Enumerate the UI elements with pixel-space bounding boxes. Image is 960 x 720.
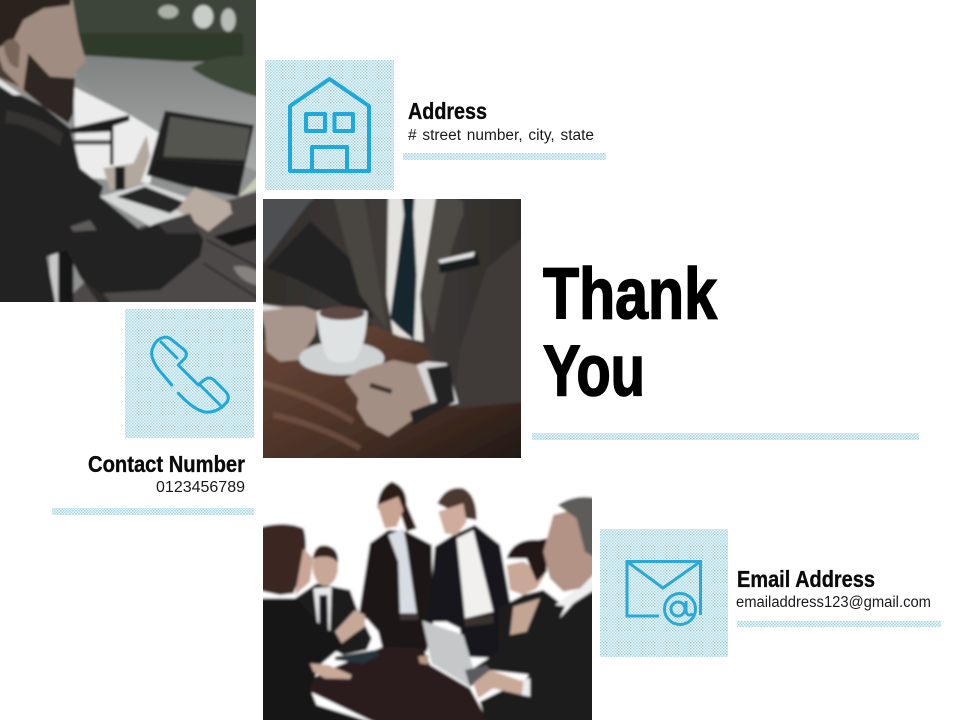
text block: address: # street number, city, state <box>408 127 594 144</box>
jacket <box>263 199 447 360</box>
table <box>71 191 256 302</box>
saucer and cup <box>299 342 384 375</box>
left hand <box>257 303 318 362</box>
text block: contact number: Contact Number <box>88 451 245 477</box>
seated man <box>295 583 372 655</box>
text block: email address <box>736 566 941 627</box>
head <box>0 0 86 96</box>
laptop <box>422 621 473 687</box>
title: Thank You: You <box>543 332 645 412</box>
text block: email address: emailaddress123@gmail.com <box>736 594 931 611</box>
table <box>257 325 527 463</box>
text block: email address: Email Address <box>737 566 875 592</box>
title: Thank You <box>543 254 718 412</box>
photo: suited man with coffee cup <box>257 192 528 463</box>
text block: address <box>403 98 606 160</box>
table <box>303 647 490 720</box>
title: Thank You: Thank <box>543 254 718 334</box>
text block: address: Address <box>408 98 487 124</box>
text block: contact number: 0123456789 <box>156 479 245 496</box>
hands <box>177 187 232 232</box>
standing woman right <box>428 525 510 658</box>
icon tile: phone <box>125 309 254 438</box>
icon: phone handset <box>152 337 228 412</box>
icon tile: address house <box>265 60 394 190</box>
icon: house <box>290 79 369 171</box>
photo: business team meeting <box>257 472 597 720</box>
right hand and cuff <box>345 360 437 437</box>
icon tile: email <box>600 529 728 657</box>
laptop <box>100 183 233 228</box>
pocket square <box>438 250 480 273</box>
man right <box>478 589 592 720</box>
man body <box>0 80 203 310</box>
icon: envelope with at sign <box>627 562 700 624</box>
text block: contact number <box>52 451 254 515</box>
photo: bearded man working on laptop <box>0 0 263 310</box>
standing woman left <box>358 530 433 652</box>
shirt and tie <box>387 192 437 342</box>
seated woman <box>473 590 565 675</box>
divider under title <box>532 433 919 440</box>
woman from behind left <box>263 596 372 720</box>
